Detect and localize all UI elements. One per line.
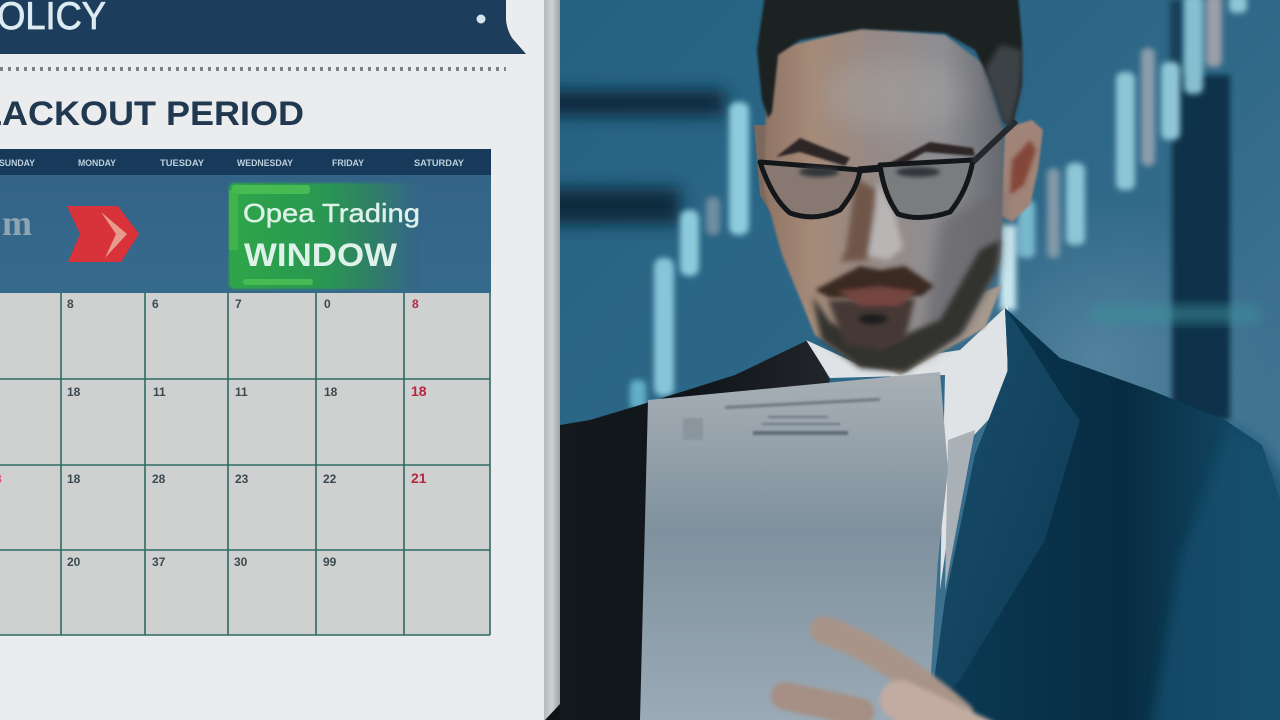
nose <box>840 178 903 262</box>
calendar dates: 6 <box>152 297 159 311</box>
dark left side of suit <box>560 340 830 720</box>
white shirt <box>806 305 1008 590</box>
document header text block <box>683 398 880 440</box>
eyebrows <box>776 138 975 172</box>
hair <box>757 0 1022 128</box>
left ear <box>754 125 772 215</box>
calendar dates: 99 <box>323 555 337 569</box>
document paper <box>640 372 948 720</box>
panel: blurred trading chart background <box>530 0 1280 720</box>
banner dot <box>476 14 486 24</box>
calendar dates: 18 <box>67 472 81 486</box>
calendar dates: 18 <box>67 385 81 399</box>
calendar dates: 0 <box>324 297 331 311</box>
weekday header bar: FRIDAY <box>332 158 364 168</box>
forehead highlight <box>825 60 965 130</box>
calendar dates: 18 <box>324 385 338 399</box>
figure: businessman reading document <box>560 0 1280 720</box>
suit sleeve <box>1150 425 1280 720</box>
cheek shadow right <box>920 190 1003 360</box>
face <box>764 28 1003 372</box>
calendar dates: 37 <box>152 555 166 569</box>
calendar dates: 8 <box>67 297 74 311</box>
calendar dates: 7 <box>235 297 242 311</box>
icon: red chevron arrow <box>67 206 139 262</box>
calendar dates: 20 <box>67 555 81 569</box>
weekday header bar: TUESDAY <box>160 158 204 168</box>
shirt shadow under collar <box>945 430 975 590</box>
calendar dates <box>0 297 427 569</box>
weekday header bar: MONDAY <box>78 158 116 168</box>
panel: policy document page <box>0 0 560 720</box>
weekday header bar: SUNDAY <box>0 158 35 168</box>
suit right body <box>930 308 1280 720</box>
hand with fingers <box>785 630 985 720</box>
page spine <box>544 0 560 720</box>
calendar dates: 23 <box>235 472 249 486</box>
calendar dates: 21 <box>411 470 427 486</box>
open trading window badge <box>229 183 420 289</box>
suit lapel <box>930 308 1080 710</box>
title banner <box>0 0 526 54</box>
weekday header bar <box>0 149 491 175</box>
eyes <box>799 167 940 177</box>
weekday header bar: SATURDAY <box>414 158 464 168</box>
partial label: m <box>2 203 32 243</box>
calendar dates: 11 <box>235 385 248 399</box>
calendar grid <box>0 293 490 635</box>
glasses <box>760 121 1016 218</box>
calendar dates: 18 <box>411 383 427 399</box>
open trading window badge: WINDOW <box>244 237 398 273</box>
calendar dates: 22 <box>323 472 337 486</box>
open trading window badge: Opea Trading <box>243 198 420 228</box>
calendar dates: 28 <box>152 472 166 486</box>
beard <box>812 240 1000 372</box>
calendar <box>0 149 491 635</box>
dotted microtext line <box>0 67 506 71</box>
calendar blue band <box>0 175 491 293</box>
calendar dates: 8 <box>412 297 419 311</box>
neck <box>850 285 1002 375</box>
calendar dates: 11 <box>153 385 166 399</box>
calendar dates: 30 <box>234 555 248 569</box>
weekday header bar: WEDNESDAY <box>237 158 293 168</box>
spine corner <box>545 704 560 720</box>
right ear <box>1000 120 1043 222</box>
mouth <box>838 286 916 324</box>
